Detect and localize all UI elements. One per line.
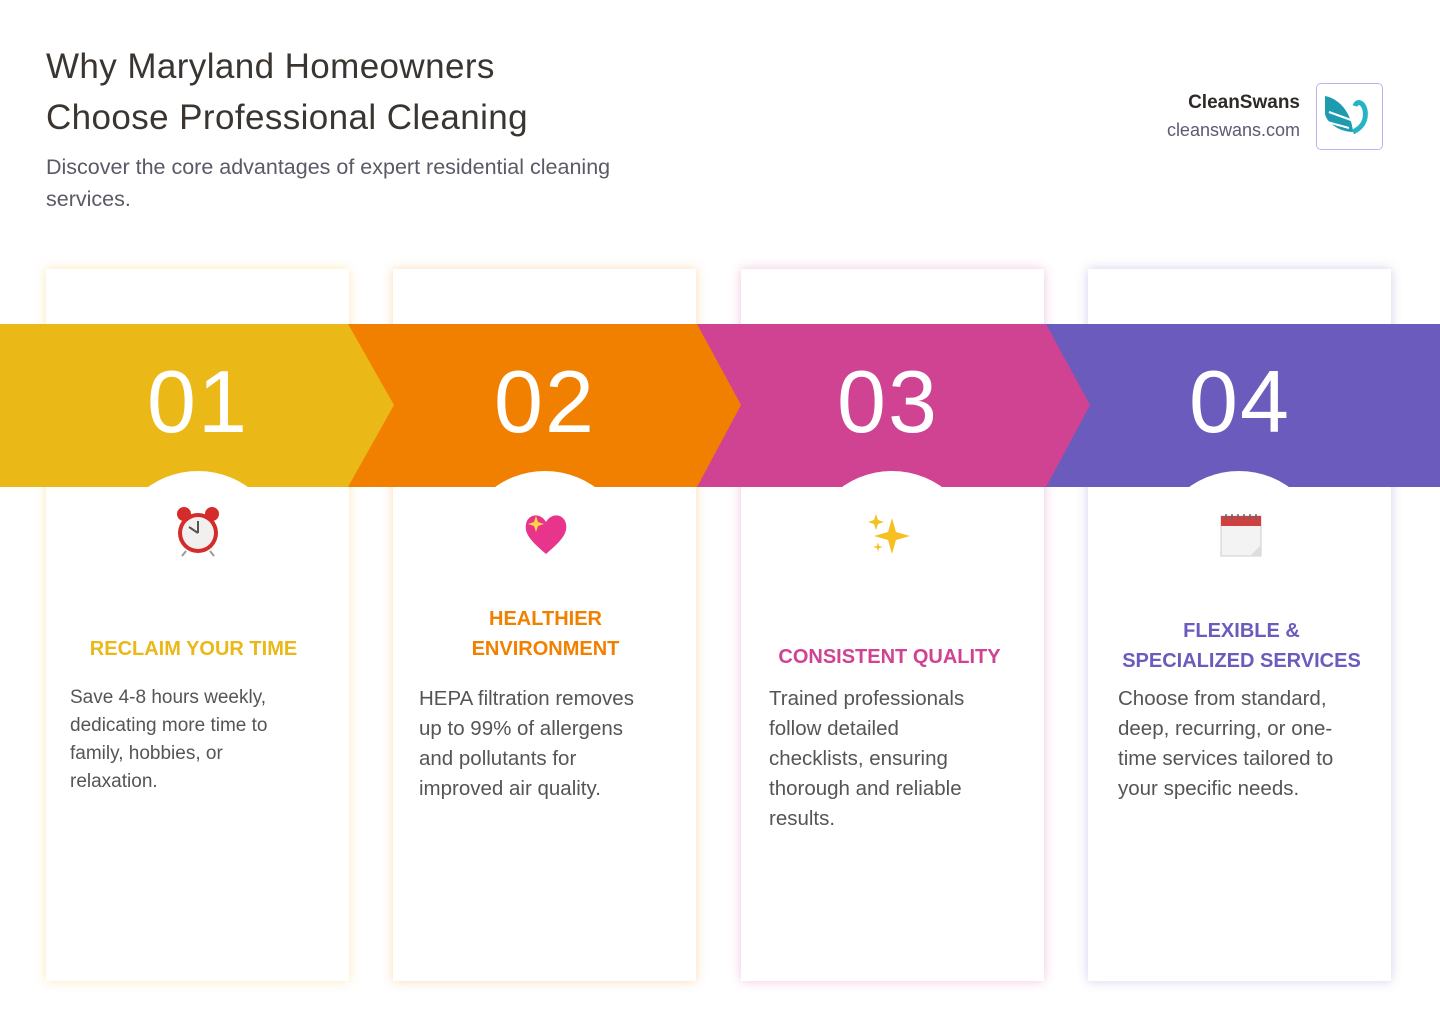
subtitle: Discover the core advantages of expert residential cleaning services. xyxy=(46,155,610,211)
brand name: CleanSwans xyxy=(1188,92,1300,113)
card 1 xyxy=(46,269,349,981)
heading 4: FLEXIBLE & xyxy=(1183,620,1300,642)
number 03: 03 xyxy=(837,352,939,451)
heading 4 xyxy=(1122,620,1361,672)
icon: alarm clock xyxy=(177,507,219,556)
heading 3: CONSISTENT QUALITY xyxy=(778,646,1001,668)
brand url: cleanswans.com xyxy=(1167,120,1300,140)
title: Choose Professional Cleaning xyxy=(46,98,528,137)
card 2 xyxy=(393,269,696,981)
icon: sparkling heart xyxy=(526,515,566,554)
number 04: 04 xyxy=(1189,352,1291,451)
heading 2: HEALTHIER xyxy=(489,608,602,630)
body 1: Save 4-8 hours weekly, dedicating more time to family, hobbies, or relaxation. xyxy=(70,687,268,792)
heading 4: SPECIALIZED SERVICES xyxy=(1122,650,1361,672)
heading 2 xyxy=(472,608,620,660)
icon: swan logo xyxy=(1316,83,1383,150)
body 4: Choose from standard, deep, recurring, or one-time services tailored to your specific needs. xyxy=(1118,687,1333,800)
icon: calendar xyxy=(1220,514,1262,556)
logo block xyxy=(1167,83,1383,150)
body 2: HEPA filtration removes up to 99% of allergens and pollutants for improved air quality. xyxy=(419,687,634,800)
heading 1: RECLAIM YOUR TIME xyxy=(90,638,297,660)
semicircles xyxy=(112,471,284,643)
card 4 xyxy=(1088,269,1391,981)
card 3 xyxy=(741,269,1044,981)
heading 2: ENVIRONMENT xyxy=(472,638,619,660)
number 01: 01 xyxy=(147,352,249,451)
arrow band xyxy=(0,324,1440,487)
number 02: 02 xyxy=(494,352,596,451)
body 3: Trained professionals follow detailed checklists, ensuring thorough and reliable results. xyxy=(769,687,964,830)
icon: sparkles xyxy=(868,514,910,554)
title xyxy=(46,47,528,137)
title: Why Maryland Homeowners xyxy=(46,47,495,86)
